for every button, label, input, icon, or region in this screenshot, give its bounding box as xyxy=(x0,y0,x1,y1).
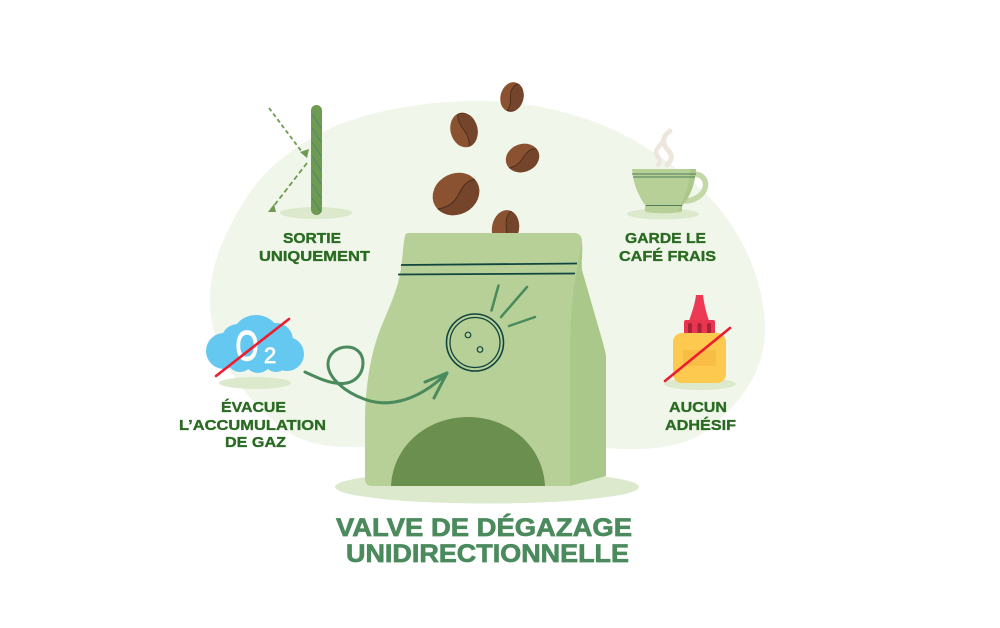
panel: évacue l'accumulation de gaz xyxy=(179,315,326,451)
heading: évacue l'accumulation de gaz: DE GAZ xyxy=(225,434,286,451)
bag seal lines xyxy=(398,264,577,274)
heading: sortie uniquement: UNIQUEMENT xyxy=(259,248,370,265)
heading: sortie uniquement: SORTIE xyxy=(283,230,341,247)
bag gusset xyxy=(560,238,606,486)
icon: degassing valve xyxy=(446,286,535,371)
panel: aucun adhésif xyxy=(664,295,736,434)
icon: bean 1 xyxy=(500,82,524,112)
heading: aucun adhésif: AUCUN xyxy=(669,399,727,416)
heading: évacue l'accumulation de gaz: L’ACCUMULATION xyxy=(179,417,326,434)
bag arch xyxy=(391,417,545,486)
heading: aucun adhésif: ADHÉSIF xyxy=(665,417,736,434)
title: UNIDIRECTIONNELLE xyxy=(346,540,629,568)
icon: bean 2 xyxy=(450,112,478,148)
icon: bean 5 xyxy=(492,210,520,233)
icon: bean 3 xyxy=(506,144,540,172)
icon: crossed out glue bottle xyxy=(664,295,736,390)
background blob xyxy=(210,101,765,449)
icon: coffee cup xyxy=(627,131,706,220)
panel: garde le café frais xyxy=(619,131,716,265)
title: VALVE DE DÉGAZAGE xyxy=(336,513,632,542)
panel: sortie uniquement xyxy=(259,105,370,265)
coffee beans xyxy=(432,82,540,233)
bag shadow xyxy=(335,470,639,504)
icon: crossed out O2 cloud: O xyxy=(236,322,258,369)
heading: garde le café frais: GARDE LE xyxy=(625,230,706,247)
arrow: looped arrow to valve xyxy=(305,347,447,403)
icon: crossed out O2 cloud xyxy=(206,315,304,389)
icon: valve wall with dashed arrows xyxy=(268,105,352,219)
icon: bean 4 xyxy=(432,172,480,216)
icon: crossed out O2 cloud: 2 xyxy=(264,343,276,368)
heading: garde le café frais: CAFÉ FRAIS xyxy=(619,248,716,265)
coffee bag xyxy=(365,233,606,486)
heading: évacue l'accumulation de gaz: ÉVACUE xyxy=(221,399,286,416)
bag front xyxy=(365,233,582,486)
